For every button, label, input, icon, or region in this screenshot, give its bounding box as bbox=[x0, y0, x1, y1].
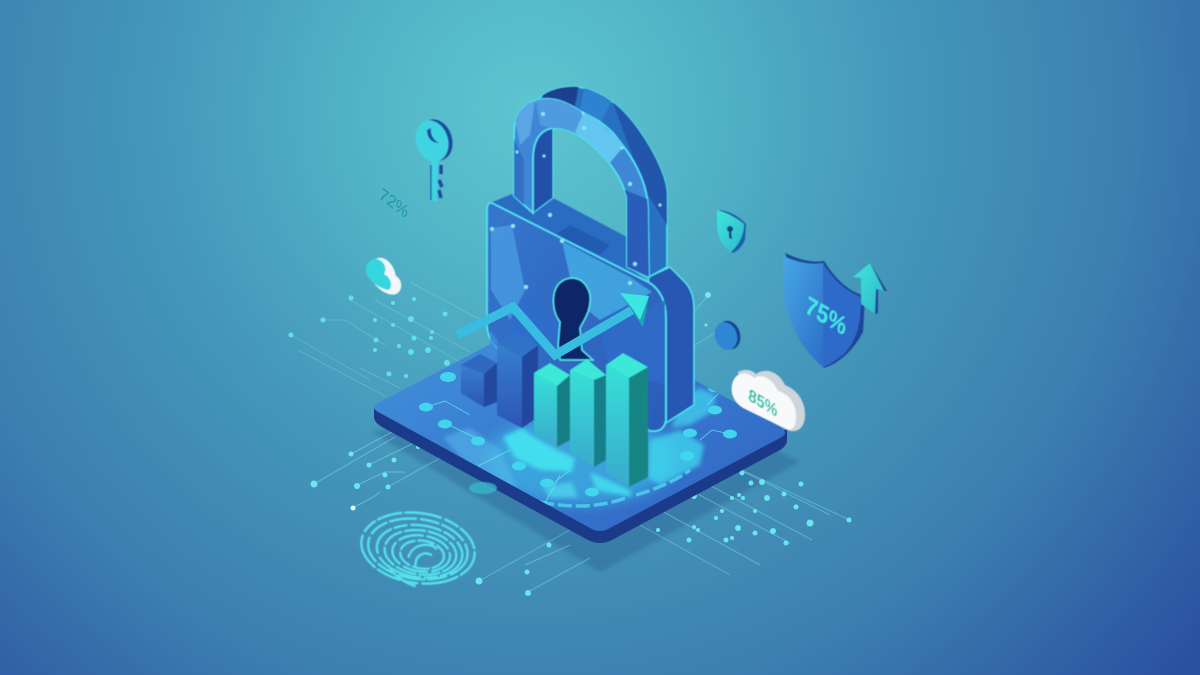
platform side edge bbox=[374, 408, 787, 543]
platform top face bbox=[374, 310, 785, 531]
shield 75% bbox=[783, 253, 865, 368]
label: 75%: 75% bbox=[802, 291, 850, 341]
padlock bbox=[487, 80, 694, 431]
fingerprint bbox=[356, 505, 479, 594]
lock body top bbox=[490, 194, 650, 283]
cloud 85% bbox=[732, 370, 805, 431]
circuit traces: right of lock bbox=[695, 292, 715, 345]
platform bbox=[374, 344, 787, 543]
shackle inner left side bbox=[533, 128, 553, 213]
small disc bbox=[711, 318, 744, 353]
smudge below platform bbox=[469, 482, 497, 494]
label: 85%: 85% bbox=[748, 385, 778, 421]
small cloud icon bbox=[366, 258, 401, 295]
up arrow bbox=[853, 263, 887, 314]
low-poly facets on lock front bbox=[490, 225, 665, 385]
circuit traces: lower left bbox=[310, 432, 440, 510]
bar 5 bbox=[606, 353, 648, 487]
bar 3 bbox=[534, 363, 570, 447]
circuit traces: upper left bbox=[288, 282, 490, 396]
small shield icon bbox=[717, 210, 746, 253]
label: 72%: 72% bbox=[377, 184, 411, 222]
shackle front face bbox=[512, 95, 650, 280]
shackle back face bbox=[535, 80, 670, 277]
bar 2 bbox=[497, 332, 538, 428]
bar 4 bbox=[570, 359, 606, 467]
circuit traces: lower right bbox=[476, 460, 852, 596]
keyhole bbox=[553, 278, 593, 360]
circuit glow on platform bbox=[419, 372, 737, 506]
key icon bbox=[410, 115, 458, 202]
platform shadow bbox=[372, 380, 800, 572]
bar chart bbox=[461, 332, 648, 487]
bar 1 bbox=[461, 354, 497, 407]
lock body front bbox=[487, 203, 666, 431]
mesh node dots bbox=[490, 112, 662, 289]
lock body side bbox=[648, 267, 694, 423]
trend arrow bbox=[457, 293, 649, 355]
